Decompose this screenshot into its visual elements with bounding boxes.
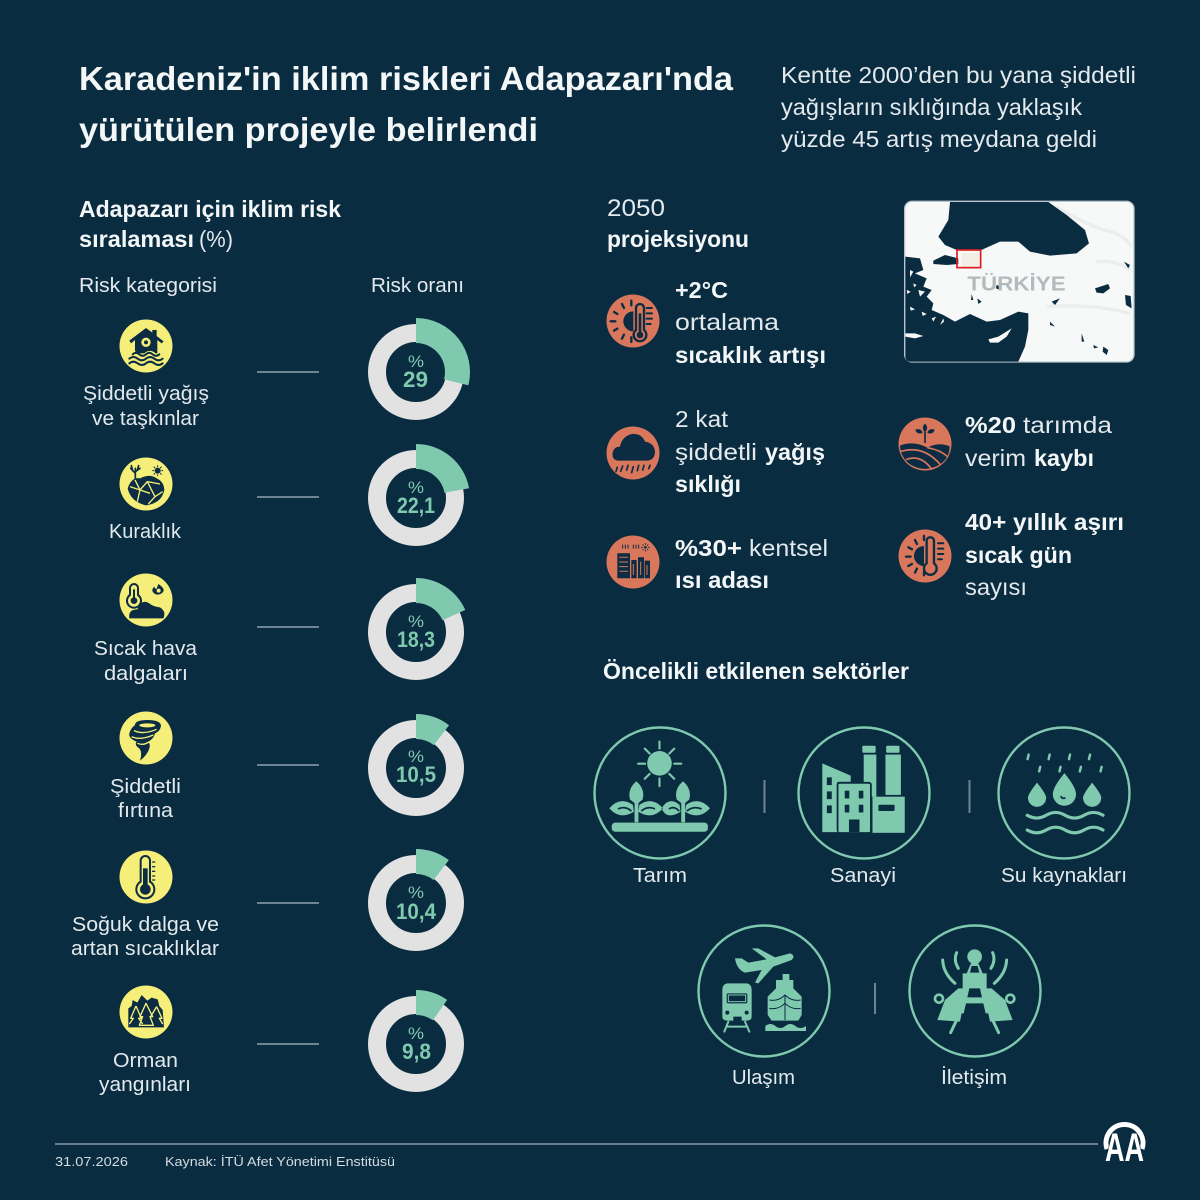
stat: extra hot days <box>898 509 1124 600</box>
sector: agriculture <box>594 728 726 887</box>
label <box>99 1050 191 1096</box>
donut chart: 29 <box>377 318 470 411</box>
donut chart: 29: 29 <box>403 367 428 392</box>
title: yürütülen projeyle belirlendi <box>79 111 538 148</box>
label: ve taşkınlar <box>92 408 199 430</box>
label <box>83 383 209 430</box>
text <box>965 412 1112 471</box>
icon: forest fire <box>120 986 172 1038</box>
heading: risk ranking: Adapazarı için iklim risk <box>79 196 341 222</box>
subtitle text block: yüzde 45 artış meydana geldi <box>781 126 1097 152</box>
icon: city and sun <box>606 536 660 588</box>
logo: AA <box>1105 1124 1144 1170</box>
label: Orman <box>113 1050 178 1072</box>
text: kaybı <box>1034 445 1094 471</box>
heading: 2050 projection <box>607 195 749 252</box>
row: severe storm <box>110 712 455 822</box>
text: sıcak gün <box>965 542 1072 568</box>
subtitle text block <box>781 62 1136 152</box>
text <box>965 509 1124 600</box>
icon: sun and thermometer <box>606 294 660 348</box>
donut chart: 18,3: % <box>408 612 424 631</box>
donut chart: 29: % <box>408 352 424 371</box>
heading: risk ranking: (%) <box>199 226 233 252</box>
subtitle text block: yağışların sıklığında yaklaşık <box>781 94 1083 120</box>
stat: agricultural yield loss <box>898 412 1112 471</box>
text: ortalama <box>675 309 779 335</box>
donut chart: 9,8 <box>377 990 455 1083</box>
text: +2°C <box>675 277 728 303</box>
source: Kaynak: İTÜ Afet Yönetimi Enstitüsü <box>165 1154 395 1169</box>
icon: sun and thermometer <box>898 530 952 582</box>
text: kentsel <box>749 535 828 561</box>
logo: AA: AA <box>1105 1126 1144 1170</box>
row: drought <box>109 444 469 543</box>
title <box>79 60 734 148</box>
donut chart: 9,8: 9,8 <box>402 1039 431 1064</box>
icon: signal tower <box>910 926 1040 1056</box>
label: Soğuk dalga ve <box>72 914 219 936</box>
sector: industry <box>798 728 930 887</box>
label: Ulaşım <box>732 1067 795 1089</box>
donut chart: 10,4 <box>377 849 455 942</box>
row: heat waves <box>94 574 465 685</box>
icon: heat wave <box>120 574 172 626</box>
donut chart: 18,3: 18,3 <box>397 627 435 652</box>
label: Sanayi <box>830 865 896 887</box>
sector: communication <box>910 926 1040 1089</box>
text: tarımda <box>1023 412 1112 438</box>
heading: risk ranking: sıralaması <box>79 226 194 252</box>
footer <box>55 1124 1144 1170</box>
icon: cracked ground <box>120 458 172 510</box>
icon: flooded house <box>120 320 172 372</box>
donut chart: 22,1: 22,1 <box>397 493 435 518</box>
title: Karadeniz'in iklim riskleri Adapazarı'nda <box>79 60 734 97</box>
text: 40+ yıllık aşırı <box>965 509 1124 535</box>
text: 2 kat <box>675 406 729 432</box>
text: ısı adası <box>675 567 769 593</box>
panel: 2050 projection <box>606 195 1124 600</box>
label <box>94 638 198 685</box>
label: Şiddetli yağış <box>83 383 209 405</box>
donut chart: 10,5: % <box>408 747 424 766</box>
label <box>110 776 181 822</box>
text <box>675 406 825 497</box>
row: heavy rain and floods <box>83 318 470 430</box>
donut chart: 9,8: % <box>408 1024 424 1043</box>
donut chart: 10,5: 10,5 <box>396 762 436 787</box>
stat: heavy rain frequency <box>606 406 825 497</box>
donut chart: 10,4: % <box>408 883 424 902</box>
icon: factory <box>798 728 930 858</box>
donut chart: 10,5 <box>377 714 455 807</box>
text: %20 <box>965 412 1016 438</box>
label: fırtına <box>118 800 174 822</box>
text: şiddetli <box>675 439 757 465</box>
text: sayısı <box>965 574 1027 600</box>
stat: temperature rise <box>606 277 826 368</box>
date: 31.07.2026 <box>55 1154 128 1169</box>
donut chart: 22,1: % <box>408 478 424 497</box>
heading: 2050 projection: projeksiyonu <box>607 226 749 252</box>
label: İletişim <box>941 1066 1007 1089</box>
text <box>675 535 828 593</box>
text: verim <box>965 445 1026 471</box>
column heading: risk category: Risk kategorisi <box>79 275 217 297</box>
sector: water resources <box>998 728 1130 887</box>
donut chart: 18,3 <box>377 578 465 671</box>
subtitle text block: Kentte 2000’den bu yana şiddetli <box>781 62 1136 88</box>
label: Su kaynakları <box>1001 865 1127 887</box>
icon: plane, train and ship <box>698 926 830 1056</box>
label: artan sıcaklıklar <box>71 938 219 960</box>
donut chart: 10,4: 10,4 <box>396 899 437 924</box>
row: cold wave and rising temperatures <box>71 849 455 960</box>
sector: transport <box>698 926 830 1089</box>
text <box>675 277 826 368</box>
icon: rain cloud <box>606 426 660 480</box>
column heading: risk ratio: Risk oranı <box>371 275 464 297</box>
heading: priority sectors: Öncelikli etkilenen sektörler <box>603 658 909 684</box>
donut chart: 22,1 <box>377 444 469 537</box>
map of Türkiye: TÜRKİYE <box>967 273 1066 296</box>
text: sıcaklık artışı <box>675 342 826 368</box>
icon: agriculture <box>594 728 726 858</box>
label: Tarım <box>633 865 687 887</box>
icon: thermometer <box>120 850 172 904</box>
icon: sprout and fields <box>898 418 952 470</box>
map of Türkiye <box>905 201 1134 362</box>
label <box>71 914 219 960</box>
label: dalgaları <box>104 663 188 685</box>
icon: water drops <box>998 728 1130 858</box>
row: forest fires <box>99 986 455 1096</box>
text: yağış <box>765 439 825 465</box>
icon: tornado <box>120 712 172 764</box>
heading: 2050 projection: 2050 <box>607 195 665 222</box>
heading: risk ranking <box>79 196 341 252</box>
text: sıklığı <box>675 471 741 497</box>
stat: urban heat island <box>606 535 828 593</box>
text: %30+ <box>675 535 742 561</box>
label: Şiddetli <box>110 776 181 798</box>
panel: risk ranking <box>71 196 470 1096</box>
label: Kuraklık <box>109 521 182 543</box>
label: yangınları <box>99 1074 191 1096</box>
label: Sıcak hava <box>94 638 198 660</box>
